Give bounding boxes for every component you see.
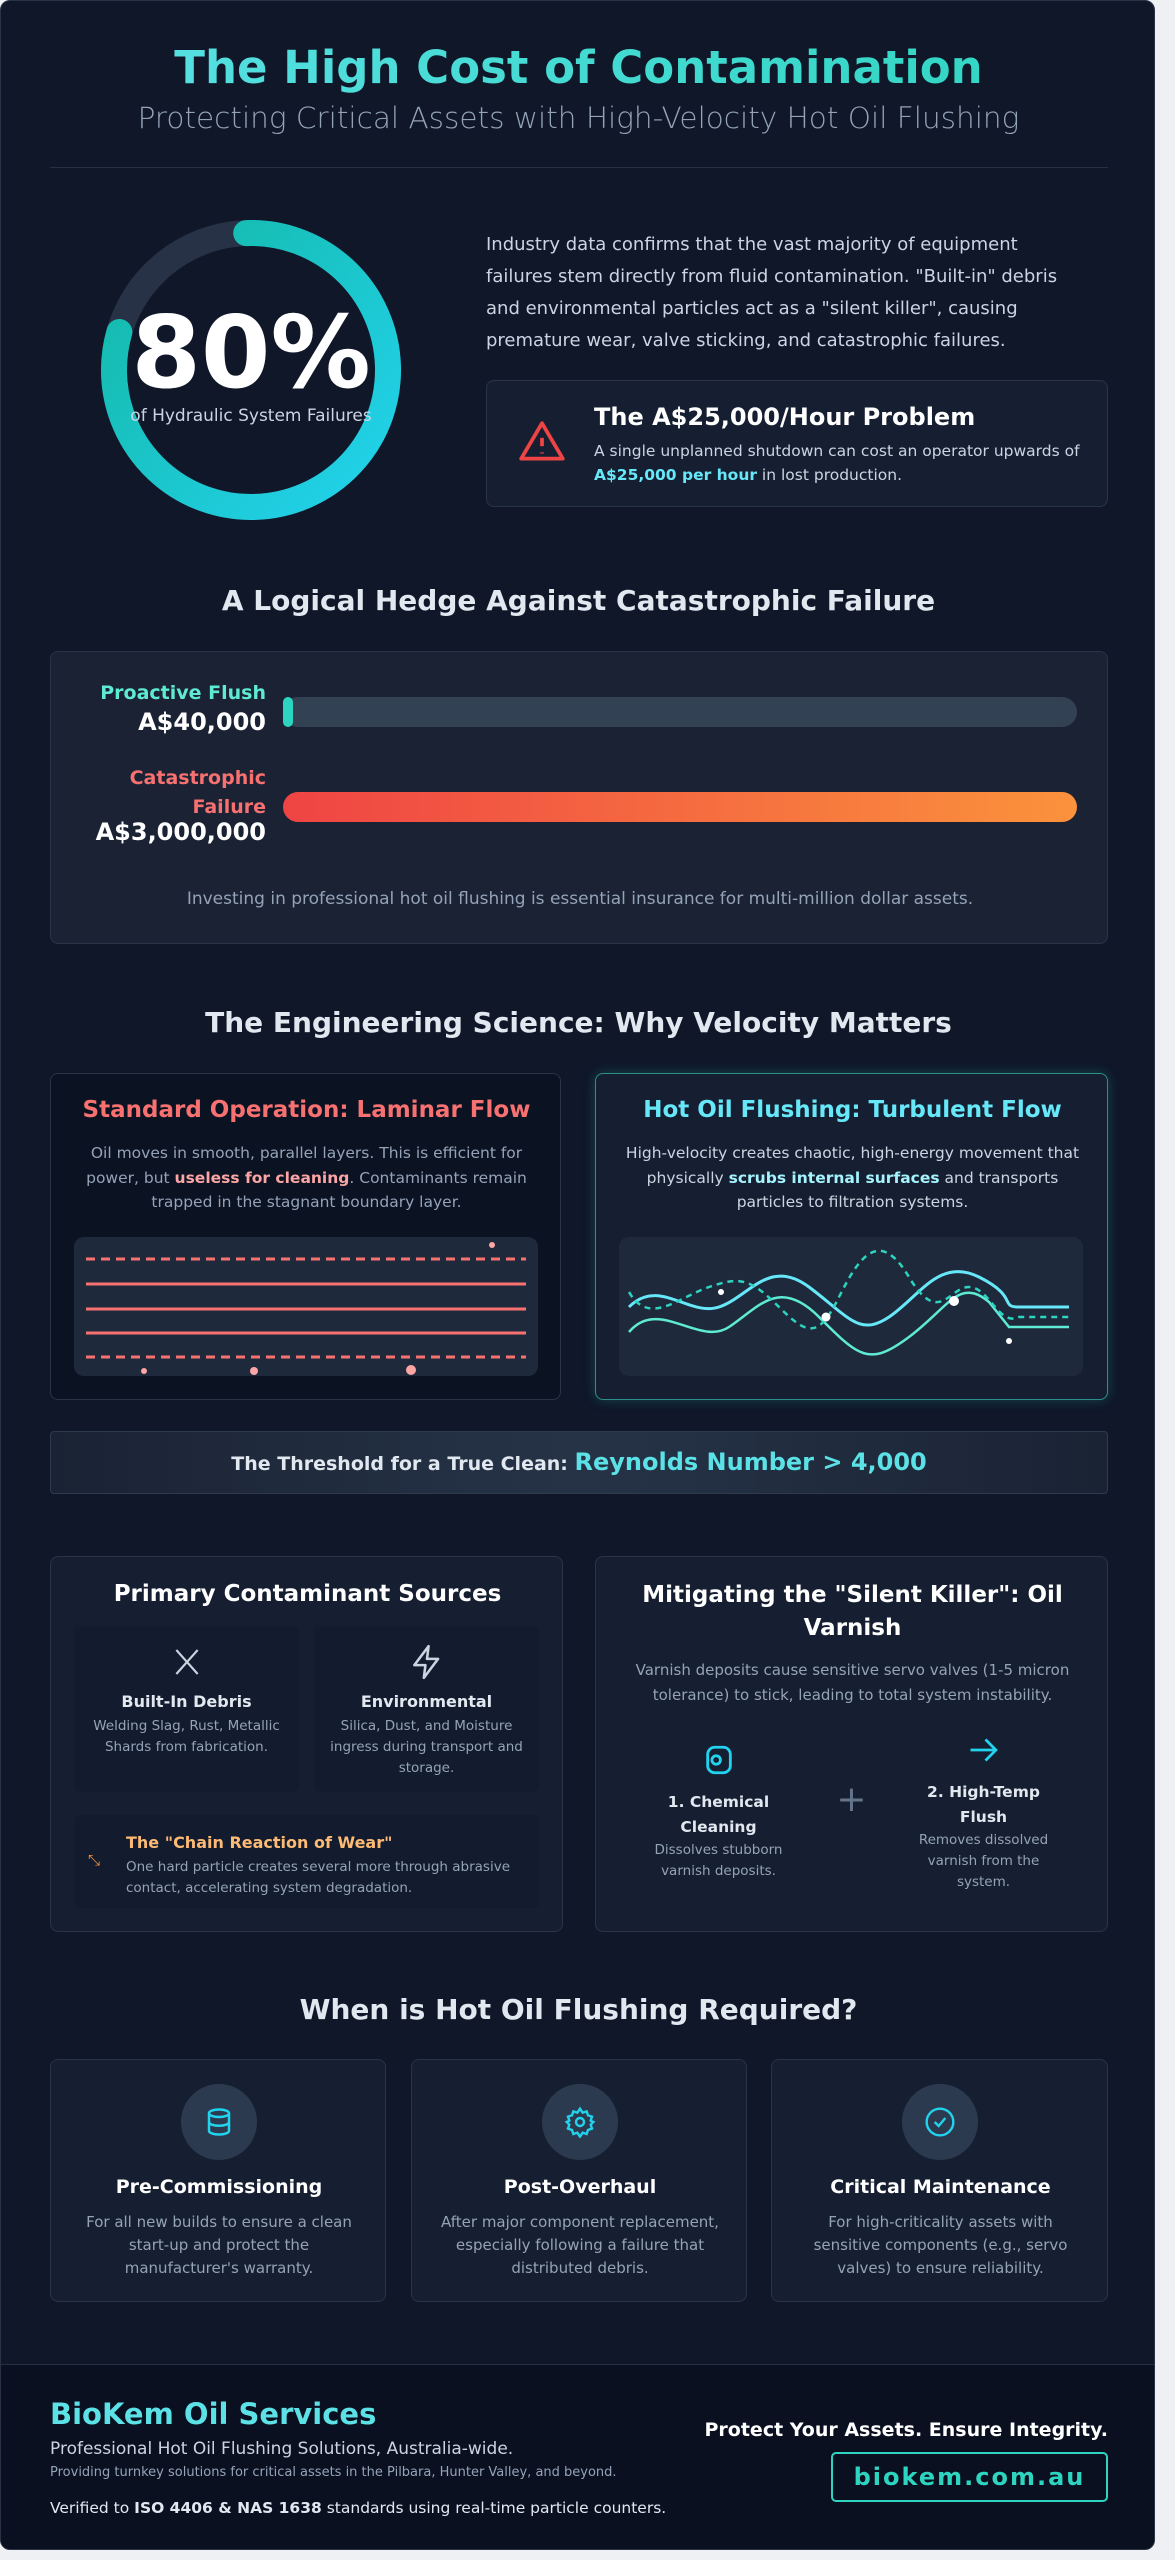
footer: Providing turnkey solutions for critical assets in the Pilbara, Hunter Valley, and beyond. xyxy=(50,2465,617,2480)
panel: oil varnish: Mitigating the "Silent Killer": Oil Varnish xyxy=(642,1582,1063,1641)
intro paragraph: and environmental particles act as a "silent killer", causing xyxy=(486,298,1018,319)
footer: Protect Your Assets. Ensure Integrity. xyxy=(704,2419,1108,2441)
heading: hedge: A Logical Hedge Against Catastrophic Failure xyxy=(222,584,935,617)
callout: reynolds number xyxy=(50,1431,1108,1494)
icon: plus: + xyxy=(836,1779,867,1820)
panel: turbulent flow: Hot Oil Flushing: Turbulent Flow xyxy=(643,1097,1062,1123)
callout: reynolds number: The Threshold for a True Clean: Reynolds Number > 4,000 xyxy=(231,1448,927,1476)
panel: cost comparison bar chart: Proactive Flush xyxy=(100,682,266,704)
panel: oil varnish xyxy=(595,1556,1108,1932)
step: chemical cleaning xyxy=(654,1746,782,1879)
panel: cost comparison bar chart: A$3,000,000 xyxy=(96,818,266,846)
panel: cost comparison bar chart xyxy=(50,651,1108,944)
step: chemical cleaning: 1. Chemical xyxy=(668,1793,769,1811)
donut chart xyxy=(101,220,401,520)
step: high-temp flush: 2. High-Temp xyxy=(927,1783,1040,1801)
intro paragraph: failures stem directly from fluid contamination. "Built-in" debris xyxy=(486,266,1057,287)
panel: cost comparison bar chart: Investing in professional hot oil flushing is essential insurance for multi-million dollar assets. xyxy=(187,889,973,909)
panel: contaminant sources: Primary Contaminant Sources xyxy=(114,1581,501,1607)
title: The High Cost of Contamination xyxy=(174,41,983,94)
icon: warning xyxy=(519,421,565,460)
card: post-overhaul: After major component replacement, especially following a failure that distributed debris. xyxy=(441,2213,719,2277)
callout: problem: A single unplanned shutdown can cost an operator upwards of A$25,000 per hour in lost production. xyxy=(594,442,1080,484)
heading: when required: When is Hot Oil Flushing Required? xyxy=(300,1993,857,2026)
panel: oil varnish: Varnish deposits cause sensitive servo valves (1-5 micron tolerance) to stick, leading to total system instability. xyxy=(636,1661,1069,1704)
footer: BioKem Oil Services xyxy=(50,2397,376,2431)
diagram: turbulent waves xyxy=(619,1237,1083,1376)
panel: cost comparison bar chart: Catastrophic xyxy=(130,767,266,789)
footer: Verified to ISO 4406 & NAS 1638 standards using real-time particle counters. xyxy=(50,2499,666,2517)
step: high-temp flush: Flush xyxy=(960,1808,1007,1826)
item: environmental xyxy=(314,1626,539,1792)
footer xyxy=(1,2364,1156,2554)
step: chemical cleaning: Cleaning xyxy=(680,1818,757,1836)
stat 80%: 80% xyxy=(131,294,371,411)
title xyxy=(1,41,1156,94)
callout: chain reaction: One hard particle creates several more through abrasive contact, accelerating system degradation. xyxy=(126,1859,510,1896)
callout: problem: The A$25,000/Hour Problem xyxy=(594,403,975,431)
panel: laminar flow xyxy=(50,1073,561,1400)
item: environmental: Silica, Dust, and Moisture ingress during transport and storage. xyxy=(330,1718,523,1776)
panel: laminar flow: Oil moves in smooth, parallel layers. This is efficient for power, but useless for cleaning. Contaminants remain trapped in the stagnant boundary layer. xyxy=(86,1144,527,1211)
card: critical maintenance: Critical Maintenance xyxy=(830,2176,1051,2198)
card: critical maintenance xyxy=(771,2059,1108,2302)
panel: cost comparison bar chart: Failure xyxy=(192,796,266,818)
card: post-overhaul: Post-Overhaul xyxy=(504,2176,656,2198)
callout: problem xyxy=(486,380,1108,507)
card: critical maintenance: For high-criticality assets with sensitive components (e.g., servo valves) to ensure reliability. xyxy=(814,2213,1067,2277)
panel: turbulent flow xyxy=(595,1073,1108,1400)
subtitle: Protecting Critical Assets with High-Velocity Hot Oil Flushing xyxy=(138,101,1019,135)
step: high-temp flush: Removes dissolved varnish from the system. xyxy=(919,1832,1048,1890)
panel: cost comparison bar chart: A$40,000 xyxy=(138,708,266,736)
panel: turbulent flow: High-velocity creates chaotic, high-energy movement that physically scrubs internal surfaces and transports particles to filtration systems. xyxy=(626,1144,1079,1211)
intro paragraph: Industry data confirms that the vast majority of equipment xyxy=(486,234,1018,255)
panel: contaminant sources xyxy=(50,1556,563,1932)
item: environmental: Environmental xyxy=(361,1692,492,1711)
card: pre-commissioning: Pre-Commissioning xyxy=(116,2176,322,2198)
card: pre-commissioning: For all new builds to ensure a clean start-up and protect the manufacturer's warranty. xyxy=(86,2213,352,2277)
card: post-overhaul xyxy=(411,2059,747,2302)
footer: biokem.com.au xyxy=(854,2463,1085,2491)
item: built-in debris xyxy=(74,1626,299,1792)
intro paragraph: premature wear, valve sticking, and catastrophic failures. xyxy=(486,330,1006,351)
stat label: of Hydraulic System Failures xyxy=(130,406,372,426)
card: pre-commissioning xyxy=(50,2059,386,2302)
callout: chain reaction: The "Chain Reaction of Wear" xyxy=(126,1833,392,1852)
panel: laminar flow: Standard Operation: Laminar Flow xyxy=(83,1097,530,1123)
callout: chain reaction xyxy=(74,1815,539,1908)
intro paragraph xyxy=(486,234,1057,351)
footer: Professional Hot Oil Flushing Solutions, Australia-wide. xyxy=(50,2439,513,2459)
heading: engineering science: The Engineering Science: Why Velocity Matters xyxy=(205,1006,952,1039)
step: chemical cleaning: Dissolves stubborn varnish deposits. xyxy=(654,1842,782,1879)
step: high-temp flush xyxy=(919,1738,1048,1890)
callout: chain reaction: ⤡ xyxy=(88,1851,100,1869)
item: built-in debris: Welding Slag, Rust, Metallic Shards from fabrication. xyxy=(93,1718,280,1755)
diagram: laminar lines xyxy=(74,1237,538,1376)
item: built-in debris: Built-In Debris xyxy=(121,1692,252,1711)
